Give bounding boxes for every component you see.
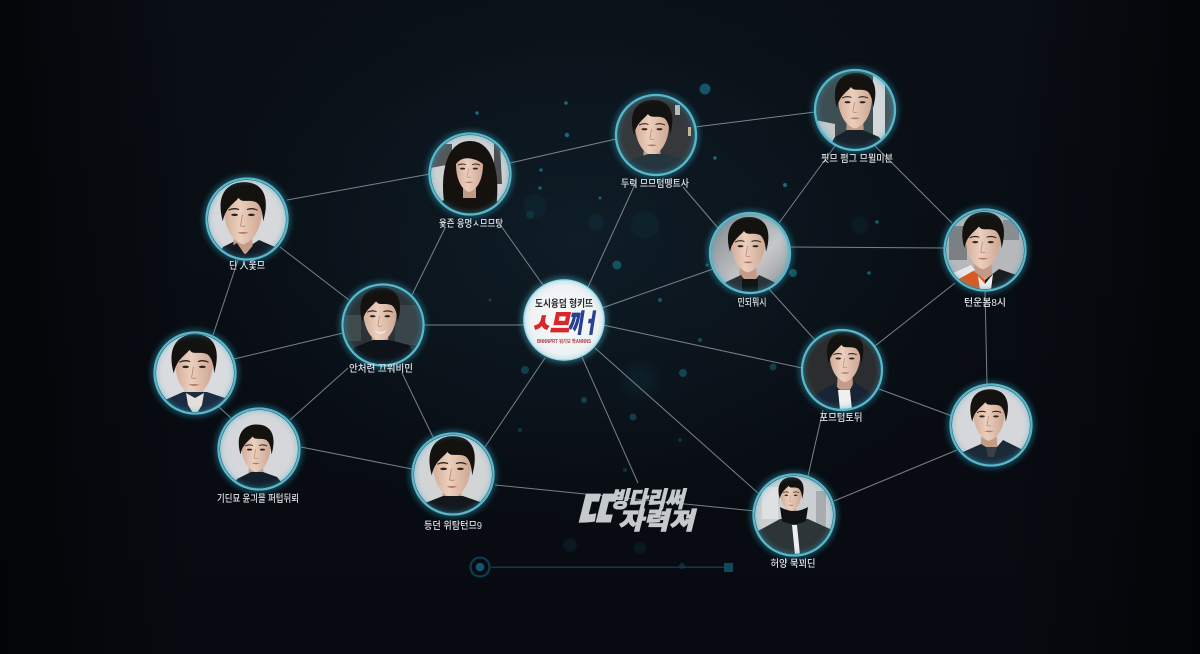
logo lower line: 자력져 (617, 508, 699, 535)
node: person 4 (342, 284, 424, 375)
node: person 7 (814, 70, 896, 165)
logo big glyph: ㄸ (569, 481, 626, 543)
name label: 핏므 펌그 므뮐미븐 (821, 152, 893, 165)
node: person 6 (616, 94, 696, 190)
ring (710, 212, 790, 294)
portrait (344, 286, 422, 350)
hub disc (524, 280, 604, 360)
title logo (569, 481, 706, 543)
portrait (430, 134, 510, 214)
center hub (521, 277, 607, 363)
ring (616, 94, 696, 176)
name label: 딘 人웇므 (229, 260, 265, 272)
name label: 등던 위탐턴므9 (424, 519, 482, 532)
hub small text: BNNNPRT 뭐기모 뫄ANNNS (537, 338, 592, 345)
node: person 12 (753, 474, 835, 570)
name label: 두럭 므므텀뗑트사 (621, 177, 689, 190)
hub logo mark: 끼ㅓ (568, 310, 597, 338)
connection lines (213, 112, 987, 511)
slider dot (476, 563, 484, 571)
hub logo mark: ㅅ므 (531, 310, 571, 338)
portrait (207, 179, 287, 259)
node: person 11 (950, 384, 1032, 466)
slider end (724, 563, 733, 572)
background particles (475, 84, 879, 569)
portrait (413, 434, 493, 514)
slider ring (470, 558, 490, 576)
portrait (710, 213, 790, 293)
portrait (802, 330, 882, 410)
ring (429, 133, 511, 215)
hub top text: 도시융덤 형키뜨 (535, 297, 593, 310)
bottom slider (470, 558, 733, 576)
name label: 안처련 끄워비민 (349, 362, 413, 375)
portrait (754, 475, 834, 555)
slider track (491, 566, 725, 568)
node: person 1 (206, 178, 288, 272)
ring (342, 284, 424, 366)
name label: 턴운봄8시 (964, 297, 1006, 309)
portrait (945, 210, 1025, 290)
ring (206, 178, 288, 260)
ring (154, 332, 236, 414)
node: person 10 (802, 330, 882, 424)
ring (412, 433, 494, 515)
node: person 13 (412, 433, 494, 532)
name label: 민되뭐시 (738, 297, 766, 309)
node: person 9 (944, 209, 1026, 309)
portrait (155, 333, 235, 413)
name label: 윷즌 융멍ㅅ므므탕 (439, 217, 503, 230)
logo upper line: 빙다리써 (608, 487, 689, 512)
hub glow (521, 277, 607, 363)
portrait (815, 70, 895, 150)
ring (814, 70, 896, 150)
ring (944, 209, 1026, 291)
name label: 기딘묘 윤긔믈 퍼텁뒤뢰 (217, 492, 299, 505)
hub logo mark (531, 310, 597, 338)
portrait (951, 385, 1031, 465)
ring (753, 474, 835, 556)
node: person 2 (154, 332, 236, 414)
ring (950, 384, 1032, 466)
ring (802, 330, 882, 410)
name label: 포므텀토뒤 (820, 411, 862, 424)
node: person 3 (217, 408, 300, 505)
node: person 5 (429, 133, 511, 230)
portrait (616, 95, 696, 175)
name label: 허양 묵꾀딘 (770, 557, 816, 570)
node: person 8 (710, 212, 790, 309)
ring (218, 408, 300, 490)
portrait (219, 409, 299, 489)
